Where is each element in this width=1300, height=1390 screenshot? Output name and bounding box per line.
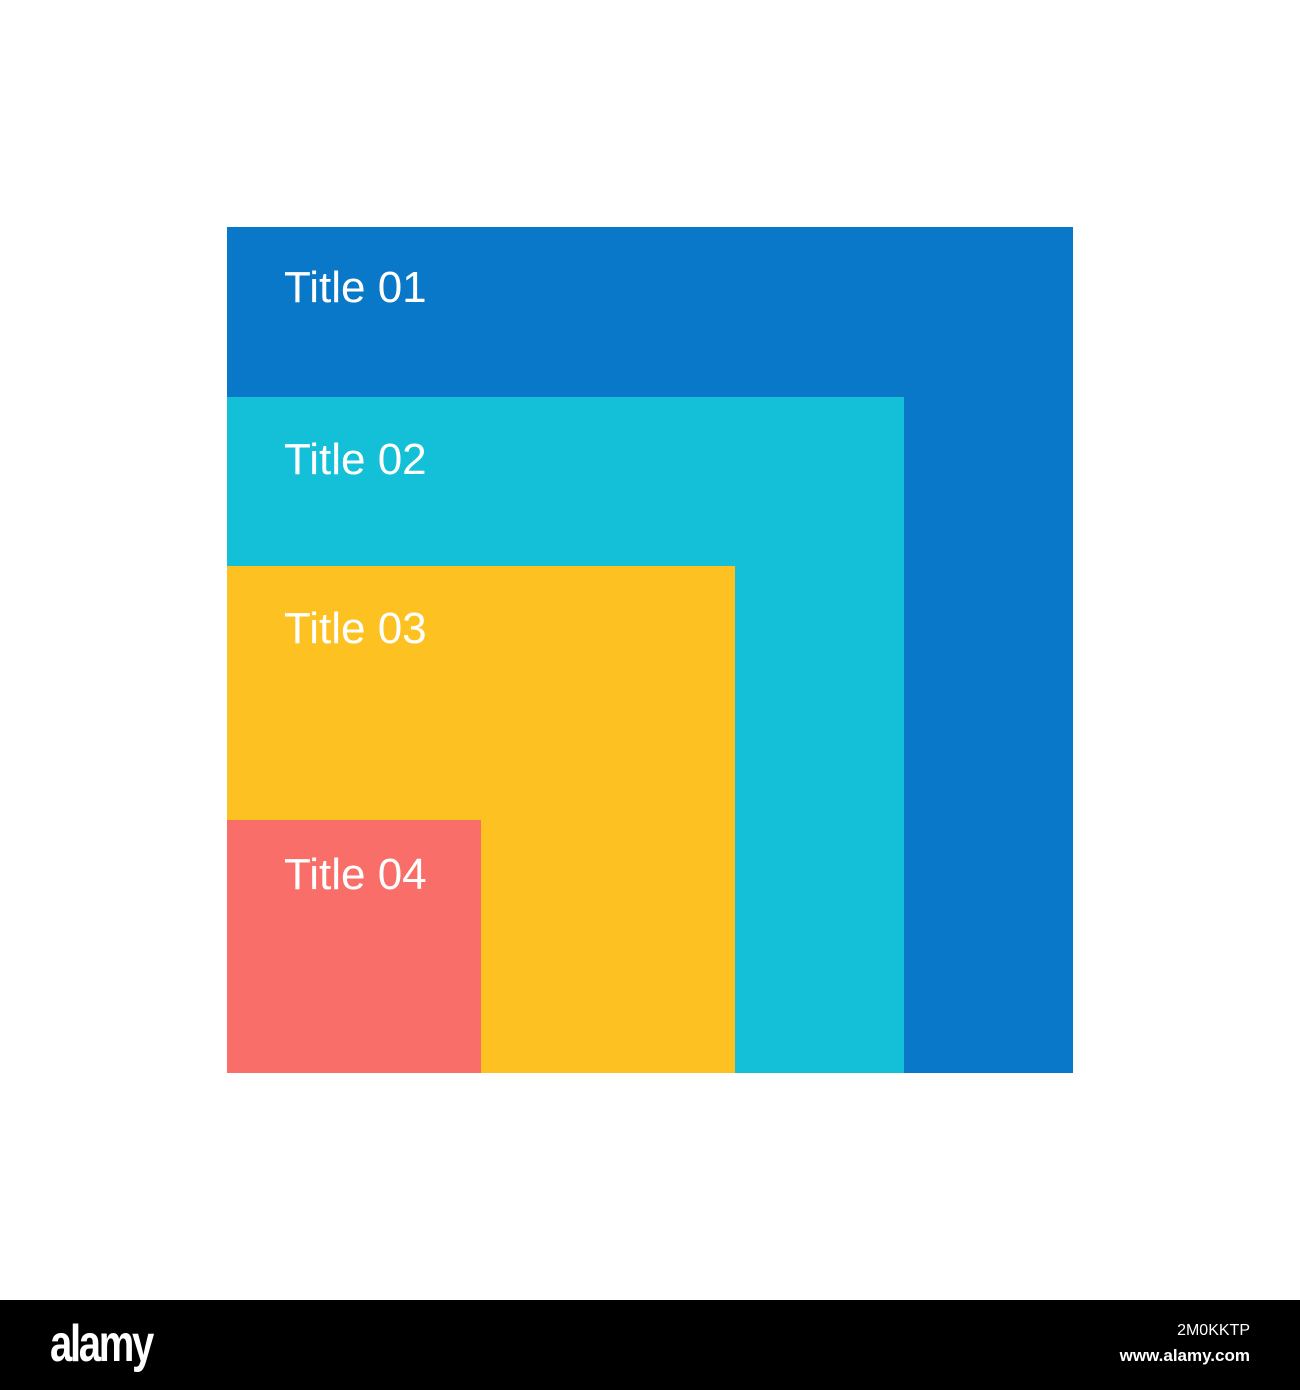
footer image id: 2M0KKTP: [1177, 1322, 1250, 1339]
panel: nested square chart: [227, 227, 1073, 1073]
heading: Title 02: Title 02: [284, 435, 427, 484]
footer logo: alamy: [50, 1315, 152, 1373]
footer bar: [0, 1300, 1300, 1390]
heading: Title 04: Title 04: [284, 850, 427, 899]
footer url: www.alamy.com: [1120, 1346, 1250, 1365]
heading: Title 03: Title 03: [284, 604, 427, 653]
panel: title 01 block (blue): [227, 227, 1073, 1073]
panel: title 04 block (red): [227, 820, 481, 1073]
panel: title 03 block (yellow): [227, 566, 735, 1073]
panel: title 02 block (cyan): [227, 397, 904, 1073]
heading: Title 01: Title 01: [284, 263, 427, 312]
